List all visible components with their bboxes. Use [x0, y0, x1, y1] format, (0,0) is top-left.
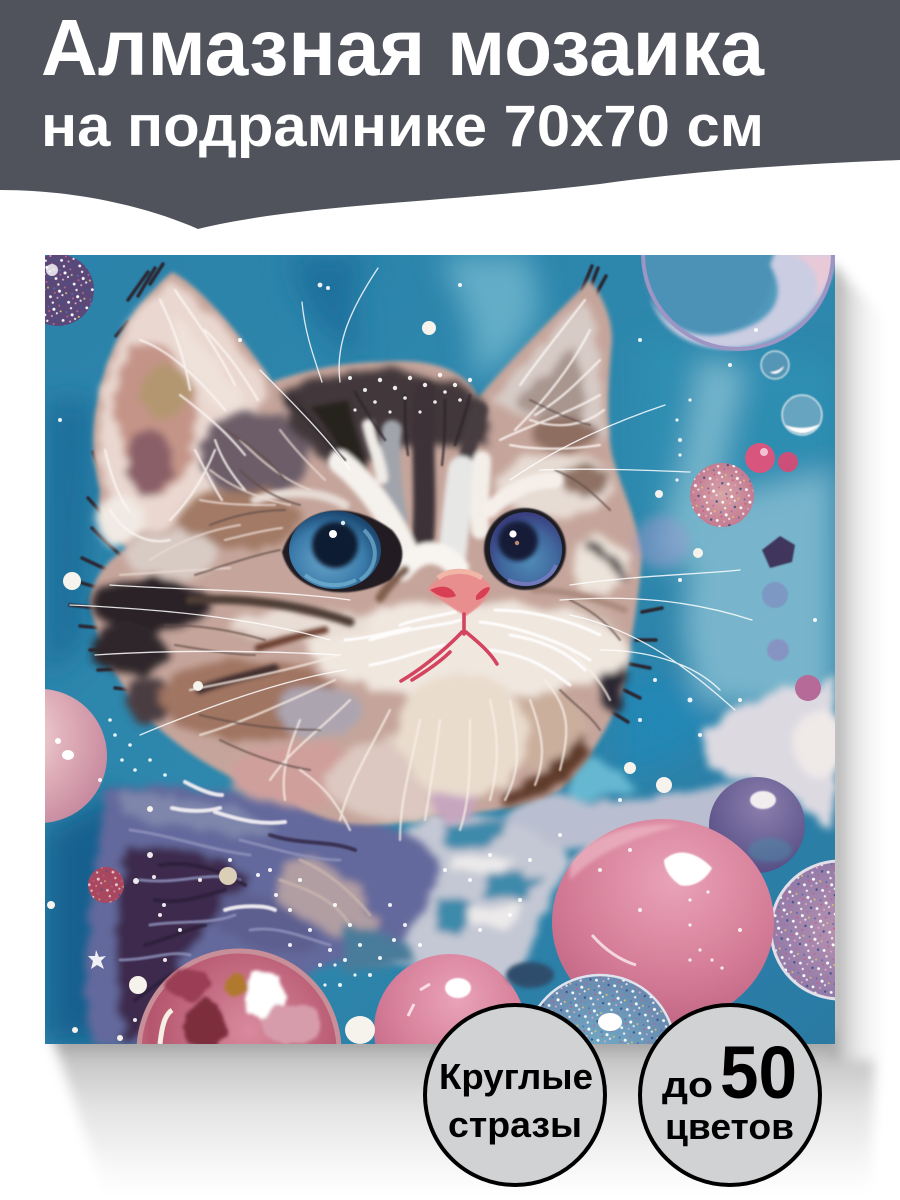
nose: [428, 571, 490, 616]
sparkles: [58, 283, 817, 1022]
white pearls: [47, 321, 703, 1044]
header ribbon: [0, 0, 900, 229]
foam and lower water: [386, 672, 835, 987]
small bubbles right: [634, 351, 822, 661]
subtitle: на подрамнике 70х70 см: [41, 94, 764, 159]
ears: [96, 280, 604, 544]
whiskers: [70, 268, 752, 735]
badge: up to 50 colours: [640, 1005, 820, 1185]
pink sphere: large: [552, 819, 774, 1025]
glitter sphere: small right: [690, 443, 798, 527]
badge: round rhinestones: [425, 1005, 605, 1185]
right eye: [482, 506, 568, 592]
glitter sphere: bottom centre: [538, 974, 672, 1044]
dark crystal: [762, 536, 795, 568]
purple sphere: [709, 777, 805, 873]
painting background: [45, 255, 835, 1044]
left eye: [282, 510, 402, 592]
canvas drop shadow: [50, 262, 885, 1200]
badge: up to 50 colours: 50: [720, 1031, 797, 1114]
kitten: [70, 264, 752, 840]
fur base: [90, 272, 642, 825]
panel: kitten painting on stretcher: [45, 255, 835, 1180]
lower body and dark swirl: [87, 786, 440, 1044]
brush streaks in lower body: [120, 782, 370, 1000]
title: Алмазная мозаика: [41, 3, 764, 92]
mouth: [401, 614, 497, 681]
small spheres: [88, 675, 821, 903]
badge: round rhinestones: Круглые: [439, 1056, 593, 1097]
glitter sphere: top left: [45, 255, 94, 326]
dark gap between spheres: [506, 962, 554, 988]
badge: up to 50 colours: до: [662, 1064, 713, 1105]
bubble: top right: [641, 255, 835, 352]
forehead stripes and white patches: [190, 392, 625, 690]
pink sphere: bottom middle: [374, 954, 522, 1044]
pink sphere: bottom left: [136, 948, 342, 1044]
face colour regions: [90, 370, 630, 826]
glitter sphere: bottom right: [770, 860, 900, 1000]
dark fringe behind the head: [70, 264, 662, 722]
pink sphere: left: [0, 689, 107, 823]
badge: up to 50 colours: цветов: [665, 1106, 794, 1147]
badge: round rhinestones: стразы: [448, 1104, 582, 1145]
fur strokes: [105, 290, 620, 840]
